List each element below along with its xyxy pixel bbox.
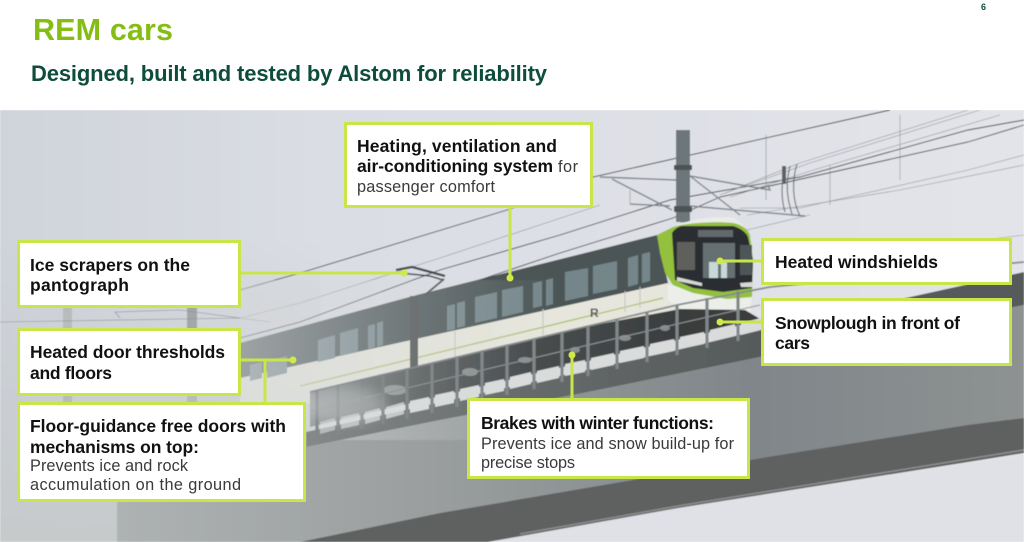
window band <box>240 235 668 378</box>
fence posts <box>317 291 738 440</box>
bridge dark lower beam <box>300 418 1024 542</box>
callout: heating, ventilation and air-conditioning <box>346 124 592 206</box>
bridge concrete web <box>117 305 1024 542</box>
title: REM cars <box>33 13 173 47</box>
callout: snowplough: Snowplough in front of <box>775 313 960 333</box>
callout: brakes: Prevents ice and snow build-up for <box>481 435 735 453</box>
callout: floor-guidance free doors: accumulation on the ground <box>30 476 241 494</box>
callout: heated windshields: Heated windshields <box>775 252 938 272</box>
callout: ice scrapers: pantograph <box>30 275 129 295</box>
subtitle: Designed, built and tested by Alstom for reliability <box>31 61 548 86</box>
callout: heated door thresholds: Heated door thresholds <box>30 342 225 362</box>
destination sign <box>698 230 733 237</box>
callout: heating, ventilation and air-conditioning: passenger comfort <box>357 178 495 196</box>
connector: HVAC to roof <box>506 207 514 282</box>
callout: brakes <box>468 400 748 478</box>
connector: brakes <box>568 352 576 399</box>
foggy pier area <box>0 240 320 542</box>
pantograph <box>396 267 445 295</box>
hatch stripes <box>677 277 702 286</box>
page background <box>0 0 1024 110</box>
mid rail <box>310 305 760 411</box>
connector: ice scrapers to pantograph <box>240 270 408 276</box>
callout: floor-guidance free doors: Floor-guidance free doors with <box>30 416 286 436</box>
mottled snow on the undercar <box>383 325 670 395</box>
lower white body <box>240 283 740 420</box>
connector: snowplough <box>716 318 762 326</box>
connector: floor-guidance doors <box>264 360 266 403</box>
door lines <box>455 287 640 358</box>
page number: 6 <box>981 2 986 12</box>
callout: heating, ventilation and air-conditioning: for <box>558 158 579 176</box>
green body stripe <box>300 298 663 386</box>
dark deck edge <box>306 272 1024 447</box>
callout: floor-guidance free doors: Prevents ice and rock <box>30 457 189 475</box>
overhead catenary wires <box>0 110 1024 345</box>
top rail <box>310 262 1024 392</box>
catenary mast and cantilever arms <box>600 130 805 222</box>
callout: floor-guidance free doors <box>18 404 304 500</box>
train body <box>240 235 740 420</box>
photo: train on a viaduct in snow <box>0 110 1024 542</box>
white parapet panels <box>320 318 761 434</box>
sky background <box>0 110 1024 542</box>
viaduct railing and deck <box>306 262 1024 447</box>
cab light top <box>672 217 745 228</box>
callout: heated windshields <box>762 240 1010 284</box>
connector: door thresholds to car <box>240 356 296 364</box>
cab skirt <box>668 285 752 316</box>
callout: snowplough <box>762 300 1010 364</box>
callout: floor-guidance free doors: mechanisms on top: <box>30 437 199 457</box>
callout: brakes: precise stops <box>481 454 575 472</box>
side windows <box>250 252 650 381</box>
callout: ice scrapers: Ice scrapers on the <box>30 255 190 275</box>
fog over the train rear <box>240 280 560 440</box>
beam edge highlight <box>520 450 1024 534</box>
callout: heated door thresholds <box>18 330 240 394</box>
callout: heating, ventilation and air-conditioning: air-conditioning system <box>357 156 553 176</box>
snow sky under the bridge <box>488 455 1024 542</box>
callout: snowplough: cars <box>775 333 810 353</box>
cab green shell <box>657 222 753 299</box>
callout: heated door thresholds: and floors <box>30 363 112 383</box>
distant faded poles <box>63 306 197 404</box>
callout: heating, ventilation and air-conditioning: Heating, ventilation and <box>357 136 557 156</box>
undercar dark mass <box>310 309 762 427</box>
train cab <box>657 217 753 316</box>
callout: ice scrapers <box>18 242 240 306</box>
connector: heated windshields <box>716 258 762 264</box>
R marker: R <box>590 306 599 320</box>
windscreen <box>672 226 753 292</box>
gangway column <box>410 296 418 376</box>
cab windows <box>677 242 695 270</box>
callout: brakes: Brakes with winter functions: <box>481 413 714 433</box>
blowing snow mist <box>275 387 385 423</box>
